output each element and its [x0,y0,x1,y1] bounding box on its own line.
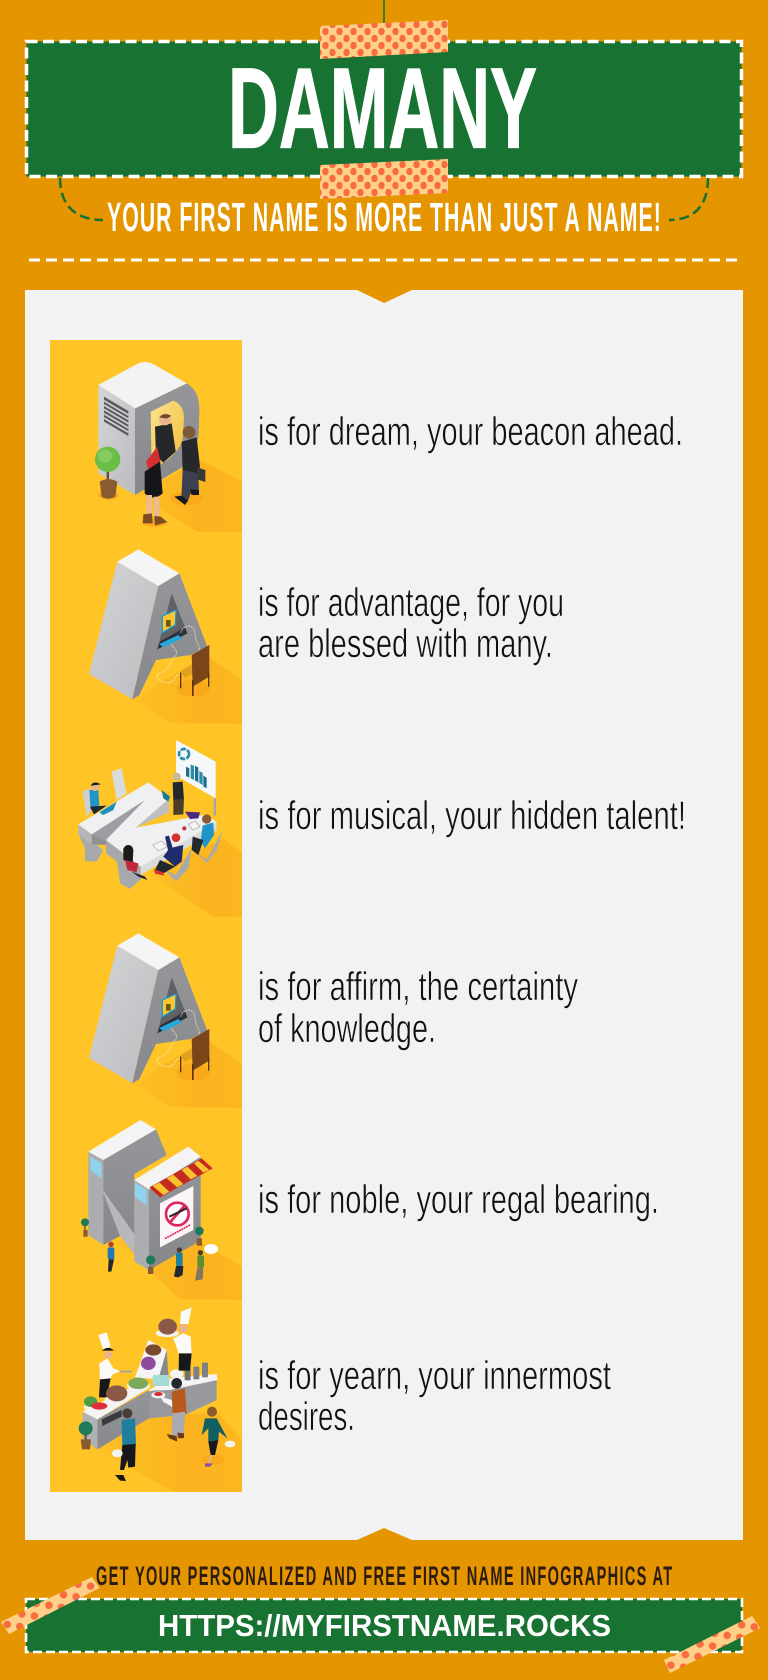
icon: letter A with desk (second) [89,933,242,1107]
text: second A line [258,965,578,1051]
panel background [25,290,743,1540]
header banner [26,0,742,199]
green url box [26,1599,742,1652]
text: second A line: is for affirm, the certainty [258,965,578,1009]
text: Y line: is for yearn, your innermost [258,1354,611,1398]
divider line [29,258,739,262]
icon: letter N as shop [81,1120,242,1299]
url text: HTTPS://MYFIRSTNAME.ROCKS [158,1609,611,1643]
left tape [1,1577,100,1634]
panel: main content [25,290,743,1540]
top tape [320,20,448,59]
text: A line [258,581,564,666]
bottom tape [320,159,448,199]
right tape [664,1616,760,1673]
subtitle: YOUR FIRST NAME IS MORE THAN JUST A NAME! [107,193,661,240]
icon: letter A with desk [89,549,242,723]
hanging thread [383,0,385,26]
green title box [26,42,742,176]
yellow illustration column [50,340,242,1492]
text: second A line: of knowledge. [258,1007,436,1051]
footer banner [1,1577,760,1673]
icon: letter M as meeting table [78,740,242,917]
footer call to action: GET YOUR PERSONALIZED AND FREE FIRST NAME INFOGRAPHICS AT [96,1560,673,1591]
text: Y line: desires. [258,1395,355,1439]
text: A line: are blessed with many. [258,622,553,666]
left bracket [60,178,103,220]
title: DAMANY [228,46,537,172]
right bracket [669,178,708,220]
text: A line: is for advantage, for you [258,581,564,625]
icon: letter Y as buffet [79,1307,242,1492]
icon: letter D with people [95,362,242,532]
text: Y line [258,1354,611,1439]
